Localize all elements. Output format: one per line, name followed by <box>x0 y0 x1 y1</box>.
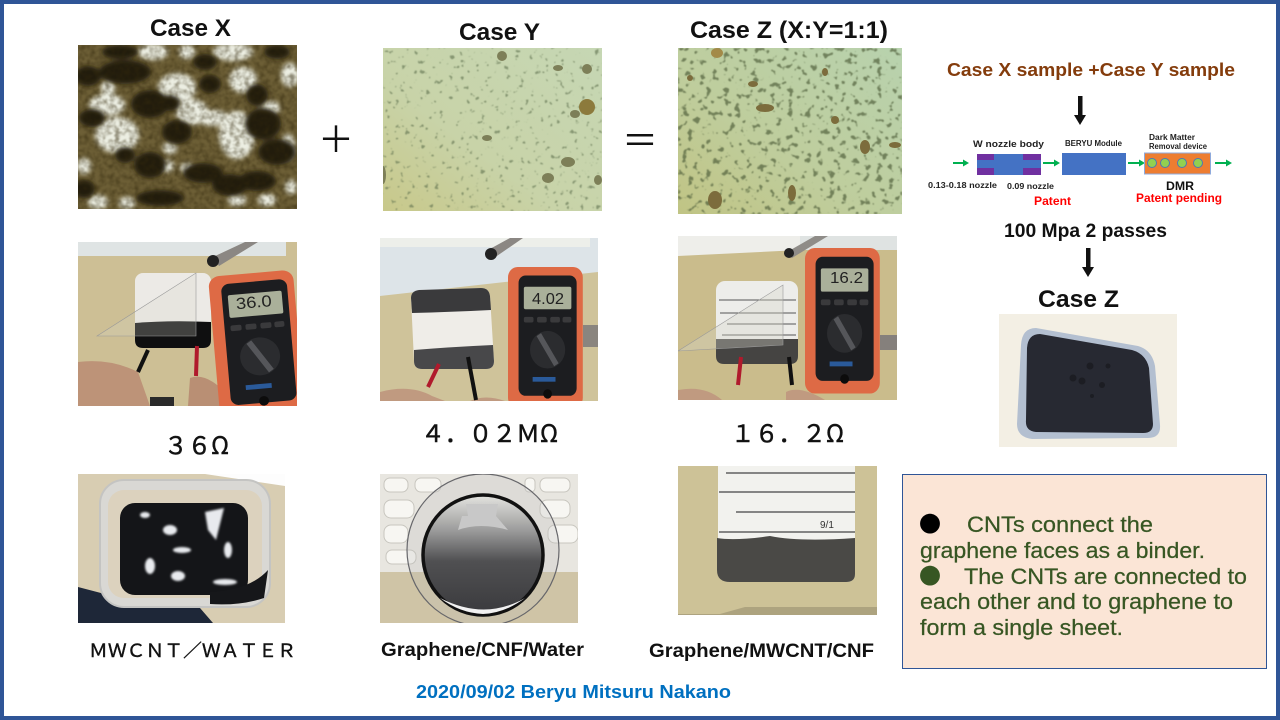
text: The CNTs are connected to: The CNTs are connected to <box>964 564 1247 589</box>
DMR device: Removal device <box>1149 142 1208 151</box>
heading: Case Z (X:Y=1:1): Case Z (X:Y=1:1) <box>690 17 888 44</box>
value: 36 ohm: ３６Ω <box>164 426 229 461</box>
photo: Case X MWCNT paste in container <box>78 474 285 623</box>
bullet: black: ● <box>919 507 941 539</box>
arrow: nozzle to module <box>1043 160 1060 166</box>
nozzle size label 0.09: 0.09 nozzle <box>1007 182 1055 191</box>
callout: CNT explanation <box>902 474 1266 668</box>
W nozzle body <box>973 139 1045 175</box>
plus sign: ＋ <box>318 111 354 163</box>
DMR device <box>1144 133 1210 193</box>
nozzle size labels: 0.13-0.18 nozzle <box>928 181 998 190</box>
text: each other and to graphene to: each other and to graphene to <box>920 589 1233 614</box>
column: Case Y <box>380 19 602 661</box>
arrow: inlet <box>953 160 969 166</box>
panel: process flow <box>928 59 1235 447</box>
arrow: outlet <box>1215 160 1232 166</box>
BERYU module <box>1062 139 1126 175</box>
micrograph: Case X <box>78 45 297 209</box>
heading: Case Y: Case Y <box>459 19 540 46</box>
arrow: module to DMR <box>1128 160 1145 166</box>
meter reading: 4.02: 4.02 <box>532 291 564 308</box>
photo: Case Z dispersion in container <box>999 314 1177 447</box>
patent pending label: Patent pending <box>1136 191 1222 205</box>
text: 100 Mpa 2 passes: 100 Mpa 2 passes <box>1004 221 1167 242</box>
bullet: green: ● <box>919 559 941 591</box>
value: 4.02 megohm: ４．０２ＭΩ <box>421 414 558 449</box>
meter reading: 36.0: 36.0 <box>235 293 273 313</box>
footer: date and author: 2020/09/02 Beryu Mitsuru Nakano <box>416 682 731 702</box>
arrow: down to Case Z <box>1082 248 1094 277</box>
DMR device: DMR <box>1166 179 1194 193</box>
micrograph: Case Y <box>383 48 602 211</box>
DMR device: Dark Matter <box>1149 133 1195 142</box>
diagram: nozzle and DMR process <box>928 133 1232 208</box>
photo: Case Z multimeter reading <box>678 236 897 400</box>
photo: Case X multimeter reading <box>78 242 297 406</box>
photo: Case Y graphene dispersion in glass dish <box>380 474 578 623</box>
value: 16.2 ohm: １６．２Ω <box>731 414 844 449</box>
heading: Case X sample + Case Y sample: Case X sample +Case Y sample <box>947 59 1235 80</box>
text: form a single sheet: form a single sheet. <box>920 615 1123 640</box>
caption: Graphene/CNF/Water: Graphene/CNF/Water <box>381 640 585 661</box>
photo: Case Z coated sheet: 9/1 <box>820 520 834 531</box>
photo: Case Z coated sheet <box>678 466 877 615</box>
patent label: Patent <box>1034 194 1071 208</box>
text: CNTs connect the: CNTs connect the <box>967 512 1153 537</box>
arrow: down to process <box>1074 96 1086 125</box>
caption: MWCNT/WATER: ＭＷＣＮＴ／ＷＡＴＥＲ <box>89 637 296 663</box>
heading: Case X: Case X <box>150 15 231 42</box>
W nozzle body: W nozzle body <box>973 139 1045 150</box>
micrograph: Case Z <box>678 48 902 214</box>
column: Case Z <box>649 17 902 662</box>
meter reading: 16.2: 16.2 <box>830 270 863 287</box>
caption: Graphene/MWCNT/CNF: Graphene/MWCNT/CNF <box>649 641 874 662</box>
text: graphene faces as a binder: graphene faces as a binder. <box>920 538 1205 563</box>
photo: Case Y multimeter reading <box>380 238 598 401</box>
column: Case X <box>73 15 305 663</box>
BERYU module: BERYU Module <box>1065 139 1123 148</box>
equals sign: ＝ <box>622 112 658 164</box>
heading: Case Z: Case Z <box>1038 286 1119 313</box>
